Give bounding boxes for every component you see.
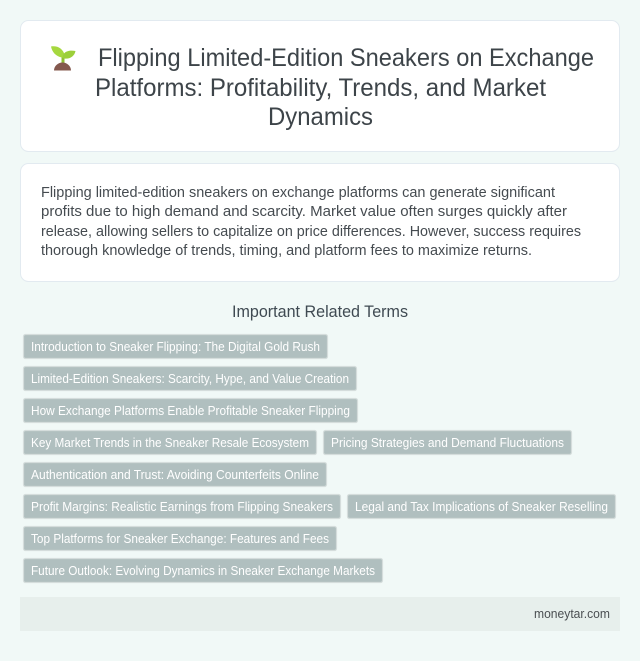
title: Platforms: Profitability, Trends, and Market [95, 74, 546, 102]
chip: Key Market Trends in the Sneaker Resale Ecosystem [31, 435, 309, 450]
chip: Legal and Tax Implications of Sneaker Reselling [355, 499, 608, 514]
heading: related terms: Important Related Terms [232, 303, 408, 321]
icon: seedling [51, 46, 76, 70]
footer: moneytar.com [534, 606, 610, 621]
panel: description [20, 164, 620, 282]
chip: Introduction to Sneaker Flipping: The Digital Gold Rush [31, 339, 320, 354]
text block: description: release, allowing sellers to capitalize on price differences. However, success requires [41, 223, 581, 240]
chip: Pricing Strategies and Demand Fluctuations [331, 435, 564, 450]
footer [20, 597, 620, 631]
chip [324, 430, 572, 454]
chip: Future Outlook: Evolving Dynamics in Sneaker Exchange Markets [31, 563, 375, 578]
chip [24, 526, 336, 550]
text block: description [41, 184, 581, 259]
text block: description: thorough knowledge of trends, timing, and platform fees to maximize returns. [41, 242, 532, 259]
chip [348, 494, 616, 518]
chip [24, 462, 326, 486]
chip: How Exchange Platforms Enable Profitable Sneaker Flipping [31, 403, 350, 418]
chip: Profit Margins: Realistic Earnings from Flipping Sneakers [31, 499, 333, 514]
text block: description: profits due to high demand and scarcity. Market value often surges quickly after [41, 203, 567, 220]
chip [24, 366, 356, 390]
chip [24, 558, 382, 582]
title [95, 44, 594, 131]
chip: Limited-Edition Sneakers: Scarcity, Hype, and Value Creation [31, 371, 349, 386]
chip [24, 494, 340, 518]
chip: Top Platforms for Sneaker Exchange: Features and Fees [31, 531, 329, 546]
chip: Authentication and Trust: Avoiding Counterfeits Online [31, 467, 319, 482]
chip [24, 398, 358, 422]
title: Dynamics [268, 103, 373, 131]
chip [24, 334, 328, 358]
title: Flipping Limited-Edition Sneakers on Exchange [98, 44, 594, 72]
chip [24, 430, 316, 454]
panel: title card [20, 20, 620, 152]
text block: description: Flipping limited-edition sneakers on exchange platforms can generate significant [41, 184, 556, 201]
term chips [24, 334, 616, 582]
